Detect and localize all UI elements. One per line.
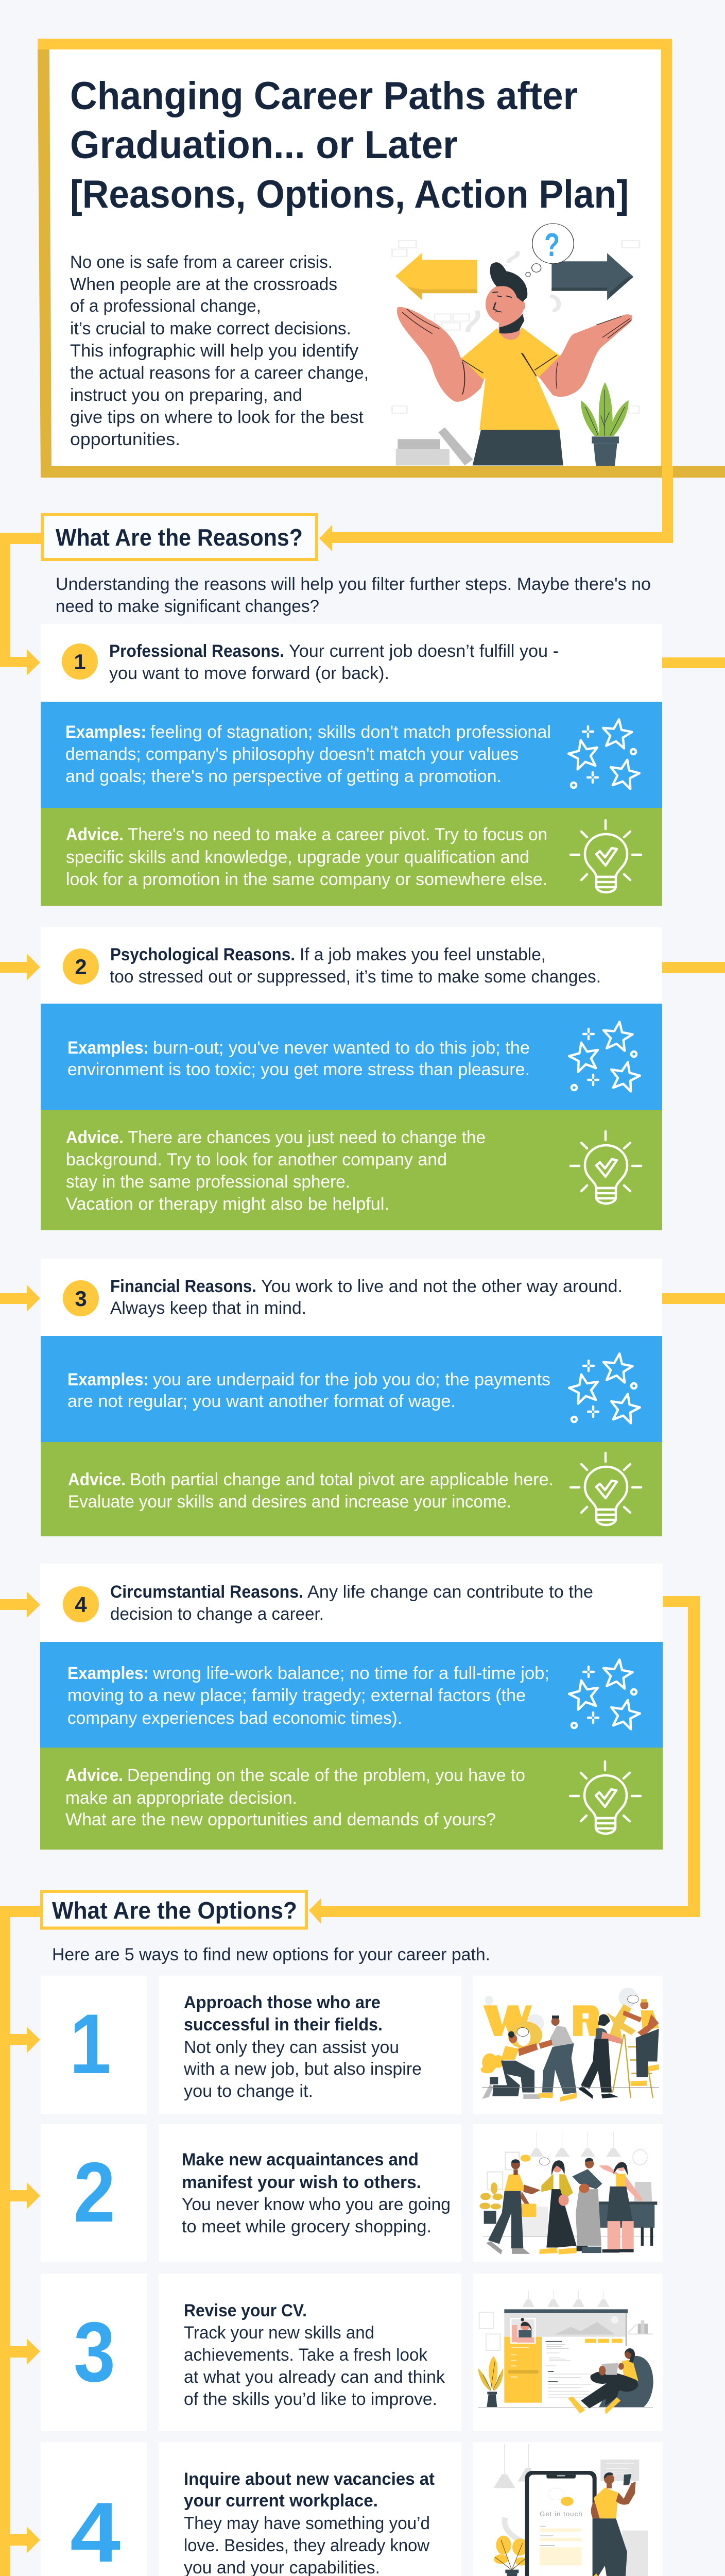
- examples block 4: wrong life-work balance; no time for a full-time job;: [152, 1664, 549, 1683]
- advice block 3: Evaluate your skills and desires and increase your income.: [68, 1492, 511, 1512]
- examples block 1: feeling of stagnation; skills don't match professional: [150, 722, 551, 742]
- option 3 text: achievements. Take a fresh look: [184, 2345, 428, 2365]
- number badge 1: [62, 643, 98, 680]
- option 4 text: They may have something you’d: [184, 2514, 430, 2533]
- option 4 text: love. Besides, they already know: [184, 2536, 429, 2555]
- examples block 1: [41, 702, 662, 808]
- examples block 2: burn-out; you've never wanted to do this job; the: [153, 1038, 530, 1058]
- intro text block: This infographic will help you identify: [70, 341, 358, 361]
- intro text block: opportunities.: [70, 430, 180, 449]
- option 1 text: Not only they can assist you: [184, 2038, 399, 2057]
- advice block 1: [41, 808, 662, 906]
- intro text block: it’s crucial to make correct decisions.: [70, 319, 351, 338]
- option 3 text: at what you already can and think: [184, 2367, 445, 2387]
- examples block 4: Examples:: [67, 1664, 149, 1683]
- reason 4 text: [110, 1582, 593, 1624]
- advice block 4: [40, 1748, 663, 1850]
- illustration: people networking in an office: [479, 2132, 657, 2255]
- examples block 3: you are underpaid for the job you do; the payments: [153, 1370, 550, 1389]
- hero illustration: confused man with two arrows: ?: [544, 226, 560, 263]
- arrow into card 3: [0, 1285, 40, 1312]
- examples block 1: demands; company's philosophy doesn't match your values: [65, 744, 519, 764]
- examples block 2: [41, 1004, 662, 1110]
- arrow: header to reasons connector: [319, 466, 673, 551]
- intro text block: No one is safe from a career crisis.: [70, 252, 333, 272]
- option 3 text: Track your new skills and: [184, 2323, 374, 2343]
- intro text block: [70, 252, 369, 449]
- reasons intro text: [56, 574, 651, 616]
- option 3 text: Revise your CV.: [184, 2301, 307, 2320]
- examples block 2: Examples:: [67, 1038, 149, 1058]
- number badge 4: [63, 1586, 99, 1622]
- illustration: online CV profile page: [478, 2291, 653, 2414]
- advice block 2: background. Try to look for another company and: [66, 1150, 447, 1170]
- advice block 2: stay in the same professional sphere.: [66, 1172, 350, 1192]
- reason 4 text: Circumstantial Reasons.: [110, 1582, 303, 1602]
- advice block 2: [41, 1110, 662, 1230]
- reason 2 text: too stressed out or suppressed, it’s time to make some changes.: [110, 967, 601, 987]
- advice block 1: specific skills and knowledge, upgrade your qualification and: [66, 848, 529, 867]
- arrow: options rail: [0, 1906, 40, 2576]
- arrow: card 4 to options connector: [309, 1596, 700, 1924]
- panel: option 4: [41, 2442, 663, 2576]
- intro text block: give tips on where to look for the best: [70, 408, 364, 427]
- reason 1 text: [109, 641, 559, 683]
- icon: stars: [567, 1351, 642, 1425]
- reason 1 text: Professional Reasons.: [109, 641, 284, 661]
- arrow into card 4: [0, 1591, 40, 1618]
- illustration: phone contact form: [494, 2444, 648, 2576]
- reason 3 text: Financial Reasons.: [110, 1277, 256, 1296]
- intro text block: When people are at the crossroads: [70, 275, 337, 294]
- panel: reason 2 psychological: [0, 927, 725, 1230]
- panel: option 2: [41, 2124, 663, 2262]
- panel: reason 4 circumstantial: [0, 1564, 663, 1850]
- panel: option 1: [41, 1976, 663, 2114]
- illustration: people building WORK letters: [481, 1988, 659, 2102]
- number badge 2: 2: [75, 955, 87, 979]
- heading: What Are the Options?: [42, 1891, 306, 1928]
- examples block 1: Examples:: [65, 722, 146, 742]
- title: Graduation... or Later: [70, 123, 458, 167]
- advice block 2: Advice.: [66, 1128, 124, 1147]
- reason 4 text: decision to change a career.: [110, 1604, 324, 1624]
- arrow: reasons to card 1 connector: [0, 533, 41, 675]
- option 1 text: with a new job, but also inspire: [183, 2059, 422, 2079]
- heading: What Are the Reasons?: What Are the Reasons?: [56, 524, 303, 551]
- advice block 4: Advice.: [65, 1766, 123, 1785]
- advice block 4: What are the new opportunities and demands of yours?: [65, 1810, 496, 1829]
- advice block 3: Both partial change and total pivot are applicable here.: [130, 1470, 554, 1489]
- illustration: phone contact form: Get in touch: [540, 2510, 582, 2518]
- option 1 text: successful in their fields.: [184, 2015, 383, 2035]
- icon: light bulb: [570, 1761, 641, 1834]
- option 2 text: You never know who you are going: [182, 2195, 451, 2214]
- icon: light bulb: [571, 1453, 641, 1525]
- option 3 text: of the skills you’d like to improve.: [184, 2389, 437, 2409]
- advice block 3: Advice.: [68, 1470, 126, 1489]
- option 4 text: [184, 2469, 436, 2576]
- number 2: 2: [74, 2145, 115, 2240]
- icon: stars: [567, 1020, 642, 1093]
- examples block 3: [41, 1336, 662, 1442]
- reason 1 text: you want to move forward (or back).: [109, 664, 389, 683]
- heading: What Are the Reasons?: [42, 515, 317, 560]
- advice block 2: Vacation or therapy might also be helpful.: [66, 1194, 389, 1214]
- option 4 text: Inquire about new vacancies at: [184, 2469, 435, 2489]
- option 2 text: manifest your wish to others.: [182, 2173, 421, 2192]
- title: Changing Career Paths after: [70, 74, 578, 118]
- advice block 1: Advice.: [66, 825, 124, 844]
- icon: light bulb: [571, 820, 641, 892]
- icon: light bulb: [571, 1131, 641, 1204]
- advice block 3: [41, 1442, 662, 1536]
- panel: option 3: [41, 2274, 663, 2431]
- examples block 4: moving to a new place; family tragedy; external factors (the: [67, 1686, 526, 1705]
- reason 4 text: Any life change can contribute to the: [307, 1582, 593, 1602]
- panel: reason 3 financial: [0, 1259, 725, 1536]
- arrow into card 2: [0, 954, 40, 980]
- option 1 text: Approach those who are: [184, 1993, 381, 2012]
- advice block 1: There's no need to make a career pivot. Try to focus on: [128, 825, 547, 844]
- examples block 4: company experiences bad economic times).: [67, 1708, 402, 1728]
- number badge 3: 3: [75, 1286, 87, 1311]
- panel: reason 1 professional: [41, 624, 725, 906]
- reason 2 text: Psychological Reasons.: [110, 945, 295, 964]
- examples block 1: and goals; there's no perspective of getting a promotion.: [65, 767, 502, 786]
- number badge 4: 4: [75, 1592, 87, 1617]
- options intro text: Here are 5 ways to find new options for your career path.: [52, 1945, 490, 1964]
- intro text block: of a professional change,: [70, 296, 261, 316]
- option 2 text: Make new acquaintances and: [182, 2150, 419, 2170]
- reason 3 text: [110, 1277, 623, 1318]
- icon: stars: [566, 717, 642, 790]
- examples block 2: environment is too toxic; you get more stress than pleasure.: [67, 1060, 530, 1079]
- number badge 1: 1: [74, 650, 86, 674]
- intro text block: instruct you on preparing, and: [70, 385, 302, 405]
- reasons intro text: Understanding the reasons will help you filter further steps. Maybe there's no: [56, 574, 651, 594]
- icon: stars: [567, 1657, 642, 1731]
- reason 3 text: Always keep that in mind.: [110, 1298, 306, 1318]
- reason 2 text: [110, 945, 601, 987]
- advice block 4: make an appropriate decision.: [65, 1788, 297, 1808]
- option 1 text: you to change it.: [184, 2081, 313, 2101]
- reason 2 text: If a job makes you feel unstable,: [300, 945, 546, 964]
- title panel: [38, 39, 725, 478]
- number badge 2: [63, 948, 99, 985]
- number 1: 1: [70, 1996, 111, 2091]
- examples block 3: Examples:: [67, 1370, 149, 1389]
- reason 3 text: You work to live and not the other way around.: [261, 1277, 623, 1296]
- hero illustration: confused man with two arrows: [392, 224, 640, 466]
- examples block 4: [40, 1642, 663, 1748]
- option 3 text: [184, 2301, 445, 2409]
- option 4 text: your current workplace.: [184, 2491, 378, 2511]
- number badge 3: [63, 1280, 99, 1316]
- option 1 text: [183, 1993, 422, 2101]
- title: [70, 74, 629, 216]
- reasons intro text: need to make significant changes?: [56, 597, 319, 616]
- title: [Reasons, Options, Action Plan]: [70, 173, 629, 216]
- examples block 3: are not regular; you want another format of wage.: [67, 1392, 456, 1411]
- heading: What Are the Options?: What Are the Options?: [52, 1897, 297, 1924]
- advice block 4: Depending on the scale of the problem, you have to: [127, 1766, 525, 1785]
- number 3: 3: [74, 2304, 115, 2399]
- option 2 text: [182, 2150, 451, 2236]
- reason 1 text: Your current job doesn’t fulfill you -: [289, 641, 559, 661]
- intro text block: the actual reasons for a career change,: [70, 363, 369, 383]
- advice block 2: There are chances you just need to change the: [128, 1128, 486, 1147]
- option 2 text: to meet while grocery shopping.: [182, 2217, 431, 2236]
- advice block 1: look for a promotion in the same company or somewhere else.: [66, 870, 547, 889]
